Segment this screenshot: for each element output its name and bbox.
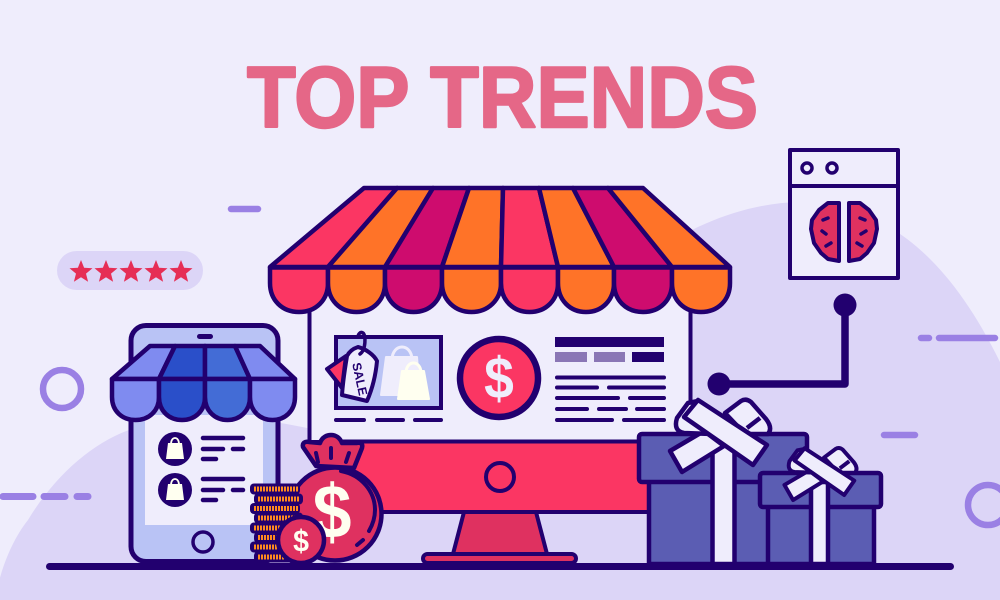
icon: sale tag: SALE <box>349 361 370 397</box>
small coin <box>278 517 324 563</box>
phone awning <box>112 346 295 420</box>
monitor stand <box>423 512 576 563</box>
small coin: $ <box>293 524 309 558</box>
store text block <box>555 337 664 420</box>
store awning <box>270 188 730 312</box>
icon: shopping bags <box>381 347 429 399</box>
money bag: $ <box>313 470 351 555</box>
list item 2 <box>158 473 243 507</box>
store front panel <box>310 290 690 442</box>
circuit connector <box>708 294 856 396</box>
decorative accents <box>3 209 1000 525</box>
list item 1 <box>158 432 243 466</box>
money bag <box>288 435 382 560</box>
bow <box>784 448 856 500</box>
title: TOP TRENDS <box>247 50 758 146</box>
store product panel <box>327 332 441 420</box>
bow <box>670 400 770 472</box>
ground line <box>46 563 954 570</box>
coin stack <box>250 484 303 562</box>
phone <box>112 326 295 562</box>
icon: brain <box>811 203 877 261</box>
brain window <box>790 150 898 278</box>
monitor band <box>345 442 650 512</box>
small gift box <box>760 448 881 564</box>
star rating <box>57 251 203 290</box>
large gift box <box>639 400 807 564</box>
dollar badge: $ <box>484 346 514 410</box>
dollar badge <box>460 339 538 417</box>
